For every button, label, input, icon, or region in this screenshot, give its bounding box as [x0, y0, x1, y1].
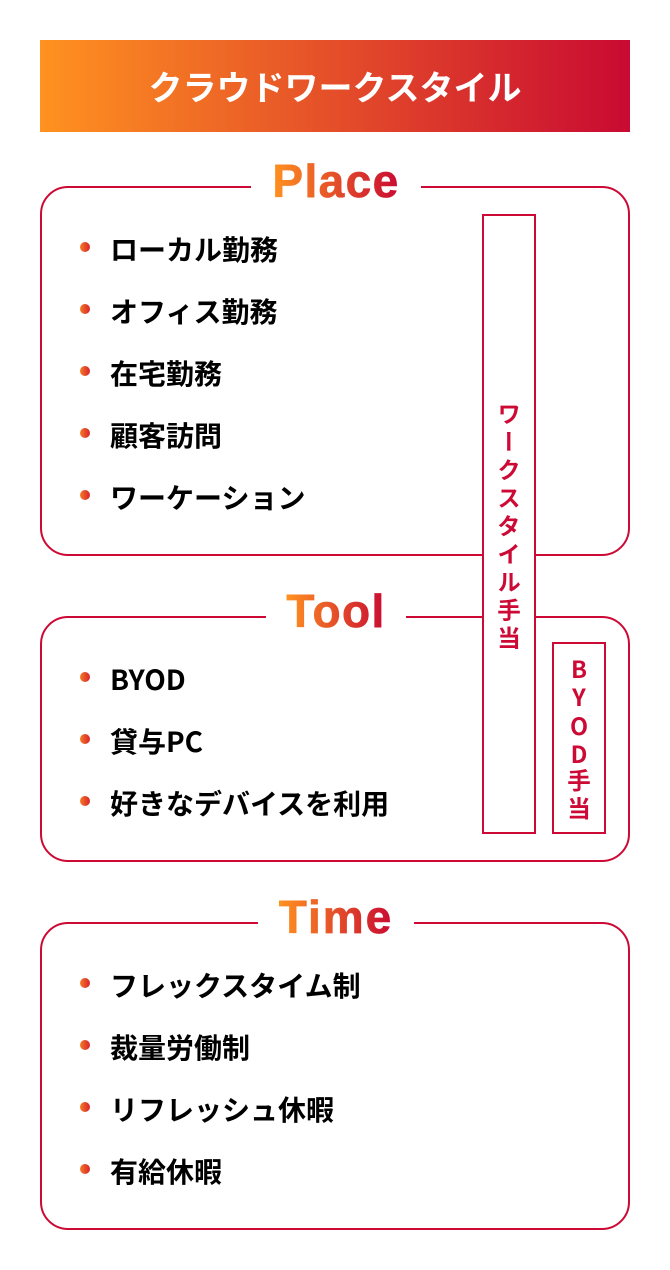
list item: リフレッシュ休暇: リフレッシュ休暇 [110, 1089, 334, 1129]
vertical bar: BYOD手当: O [570, 708, 588, 742]
panel: Place [40, 155, 630, 556]
heading: Place: Place [272, 155, 400, 207]
heading: Time [258, 896, 414, 940]
list item: 在宅勤務: 在宅勤務 [110, 353, 222, 393]
panel: Tool [40, 585, 630, 862]
title: クラウドワークスタイル [148, 61, 521, 110]
heading: Time: Time [279, 891, 393, 943]
title [40, 40, 630, 132]
list item: 好きなデバイスを利用: 好きなデバイスを利用 [110, 783, 389, 823]
list item: ローカル勤務: ローカル勤務 [110, 229, 278, 269]
list item: 顧客訪問: 顧客訪問 [110, 415, 222, 455]
vertical bar: BYOD手当: 手 [567, 762, 591, 796]
list item: ワーケーション: ワーケーション [110, 477, 305, 517]
vertical bar: BYOD手当: Y [572, 679, 586, 713]
heading: Tool [266, 590, 406, 634]
vertical bar: BYOD手当 [552, 642, 606, 834]
list item: BYOD: BYOD [110, 659, 186, 699]
list item: 有給休暇: 有給休暇 [110, 1151, 222, 1191]
vertical bar: BYOD手当: D [571, 736, 587, 770]
list item: 裁量労働制: 裁量労働制 [110, 1027, 250, 1067]
list item: オフィス勤務: オフィス勤務 [110, 291, 277, 331]
vertical bar: BYOD手当: 当 [567, 790, 591, 824]
heading: Tool: Tool [286, 585, 386, 637]
vertical bar: ワークスタイル手当: ワークスタイル手当 [492, 402, 526, 654]
list item: 貸与PC: 貸与PC [110, 721, 203, 761]
vertical bar: BYOD手当: B [571, 651, 587, 685]
panel: Time [40, 891, 630, 1230]
vertical bar: ワークスタイル手当 [482, 214, 536, 834]
heading: Place [251, 160, 421, 204]
list item: フレックスタイム制: フレックスタイム制 [110, 965, 361, 1005]
